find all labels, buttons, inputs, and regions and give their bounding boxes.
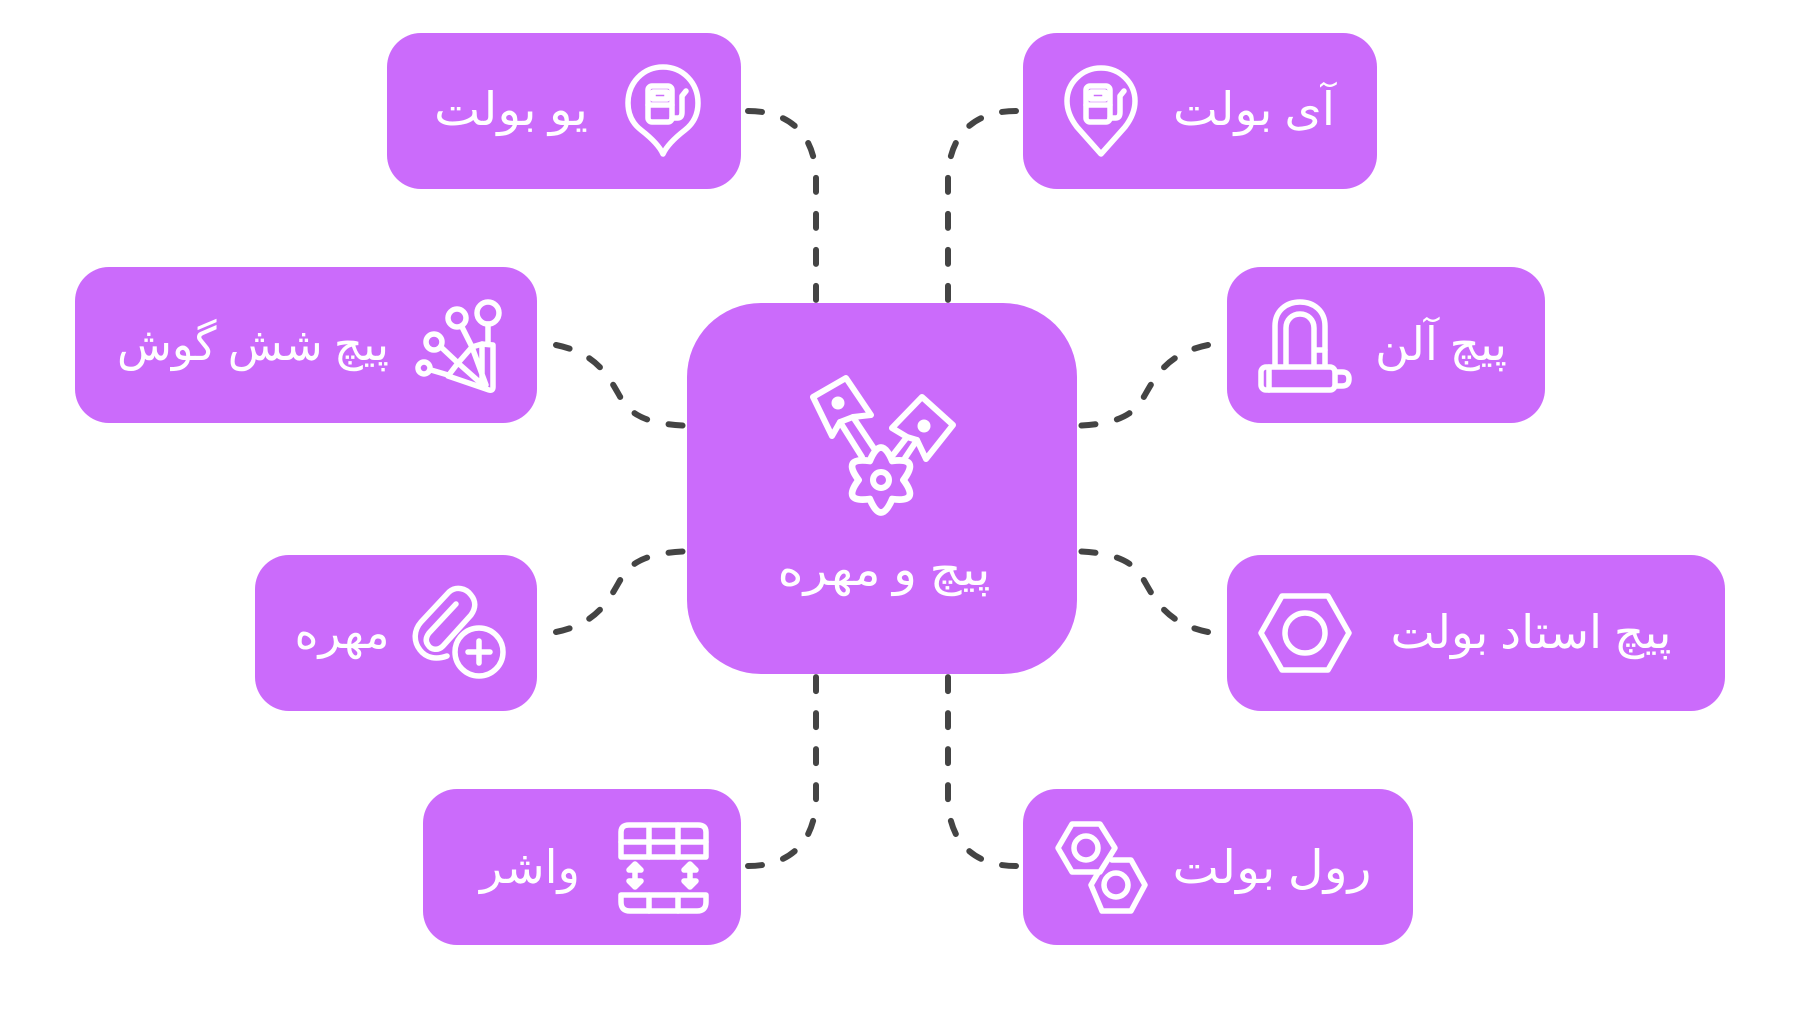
icon: shackle [1261, 302, 1349, 390]
label: hex bolt: پیچ شش گوش [117, 318, 389, 372]
connector: nut to centre [556, 551, 700, 632]
icon: two hex nuts [1058, 824, 1145, 911]
centre heading: پیچ و مهره [778, 544, 990, 597]
panel: roll bolt [1023, 789, 1413, 945]
connector: washer to centre [748, 667, 816, 866]
icon: fuel pin [1067, 68, 1135, 154]
panel: allen bolt [1227, 267, 1545, 423]
connector: u-bolt to centre [748, 111, 816, 310]
label: washer: واشر [478, 842, 580, 895]
panel: centre [687, 303, 1077, 674]
panel: u-bolt [387, 33, 741, 189]
panel: i-bolt [1023, 33, 1377, 189]
connector: allen bolt to centre [1064, 345, 1208, 426]
icon: branching nodes [418, 302, 499, 390]
icon: hex nut [1261, 596, 1349, 670]
panel: washer [423, 789, 741, 945]
icon: washer grid [621, 825, 706, 911]
label: allen bolt: پیچ آلن [1375, 317, 1507, 372]
panel: hex bolt [75, 267, 537, 423]
connector: hex bolt to centre [556, 345, 700, 426]
connector: stud bolt to centre [1064, 551, 1208, 632]
icon: pistons and gear [813, 378, 953, 512]
panel: nut [255, 555, 537, 711]
label: nut: مهره [294, 607, 390, 660]
panel: stud bolt [1227, 555, 1725, 711]
icon: fuel pin [628, 67, 698, 154]
icon: paperclip with plus [415, 588, 503, 676]
connector: i-bolt to centre [948, 111, 1016, 310]
label: stud bolt: پیچ استاد بولت [1390, 607, 1672, 660]
label: u-bolt: یو بولت [434, 84, 588, 137]
label: roll bolt: رول بولت [1172, 842, 1372, 895]
label: i-bolt: آی بولت [1173, 82, 1337, 137]
connector: roll bolt to centre [948, 667, 1016, 866]
